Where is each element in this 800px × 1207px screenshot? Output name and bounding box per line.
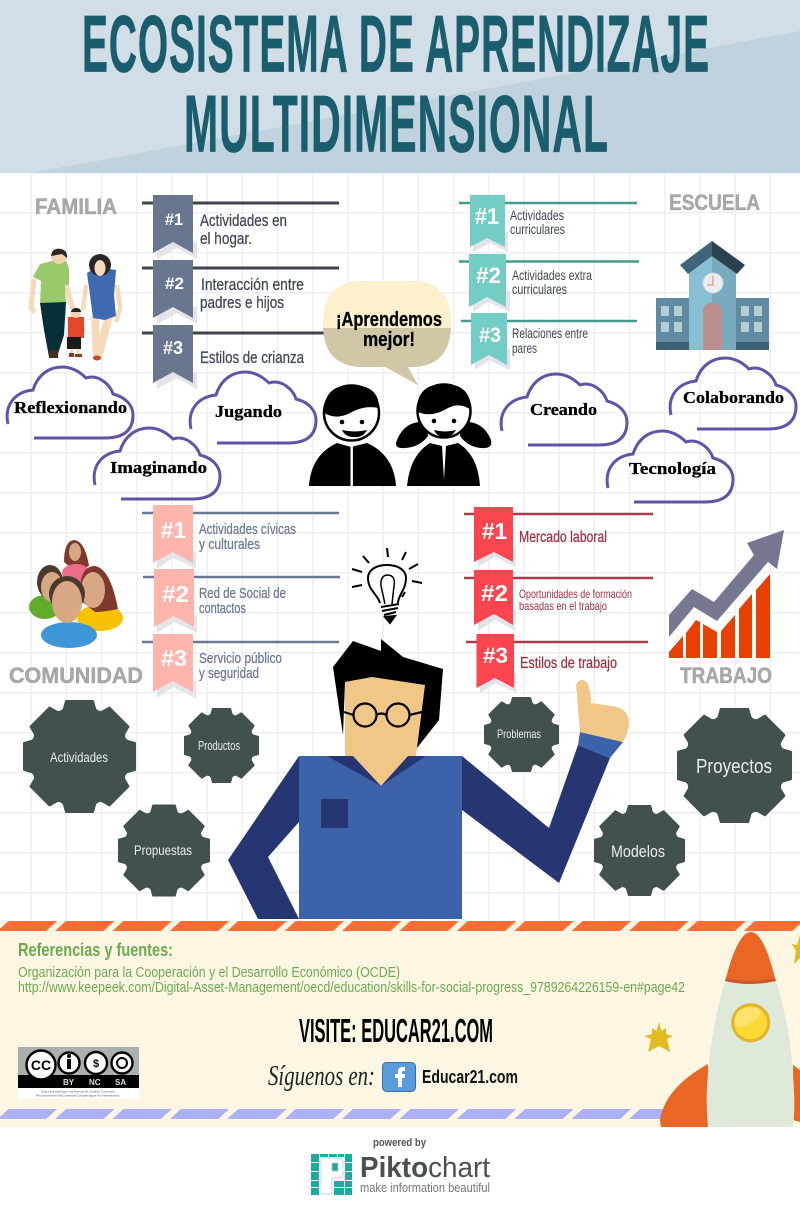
icon: girl xyxy=(396,384,491,486)
ribbon list: escuela: pares xyxy=(512,341,537,356)
ribbon list: familia xyxy=(142,195,339,389)
cloud: reflexionando xyxy=(7,367,133,438)
gear: problemas xyxy=(485,698,558,771)
gear: actividades: Actividades xyxy=(50,749,108,765)
heading: escuela: ESCUELA xyxy=(669,190,760,215)
gear: problemas: Problemas xyxy=(497,727,541,741)
ribbon list: escuela: curriculares xyxy=(510,222,565,237)
ribbon list: comunidad: contactos xyxy=(199,600,246,617)
cloud: colaborando: Colaborando xyxy=(683,388,784,407)
powered by: powered by xyxy=(373,1137,427,1149)
follow us: Educar21.com xyxy=(422,1067,518,1087)
cloud: colaborando xyxy=(670,358,796,429)
ribbon list: trabajo: basadas en el trabajo xyxy=(519,599,607,613)
creative commons badge: $ xyxy=(93,1058,99,1070)
ribbon list: escuela: Relaciones entre xyxy=(512,326,588,341)
cloud: imaginando xyxy=(94,428,220,499)
cloud: imaginando: Imaginando xyxy=(110,458,207,477)
heading: trabajo: TRABAJO xyxy=(680,663,772,688)
ribbon list: trabajo: Oportunidades de formación xyxy=(519,587,632,601)
icon: rocket xyxy=(660,932,800,1127)
gear: propuestas: Propuestas xyxy=(134,842,192,858)
ribbon list: comunidad: #3 xyxy=(161,645,187,671)
gear: proyectos xyxy=(678,709,791,822)
ribbon list: familia: padres e hijos xyxy=(200,293,284,312)
gear: productos: Productos xyxy=(198,738,240,753)
gear: modelos xyxy=(595,806,684,895)
ribbon list: escuela: #3 xyxy=(479,324,501,347)
ribbon list: escuela xyxy=(459,195,639,370)
footer panel xyxy=(0,921,800,1127)
creative commons badge: NC xyxy=(89,1078,101,1087)
cloud: tecnologia: Tecnología xyxy=(629,459,717,478)
gear: actividades xyxy=(24,701,135,812)
title xyxy=(82,0,710,170)
ribbon list: comunidad xyxy=(142,505,340,698)
ribbon list: familia: #2 xyxy=(165,274,184,293)
ribbon list: escuela: Actividades xyxy=(510,208,564,223)
piktochart logo xyxy=(311,1152,490,1195)
ribbon list: familia: el hogar. xyxy=(200,229,252,248)
gear: modelos: Modelos xyxy=(611,842,665,861)
ribbon list: escuela: curriculares xyxy=(512,282,567,297)
cloud: tecnologia xyxy=(607,431,733,502)
ribbon list: trabajo xyxy=(464,507,653,693)
ribbon list: escuela: Actividades extra xyxy=(512,268,592,283)
creative commons badge: Reconocimiento-NoComercial-CompartirIgual 4.0 Internacional. xyxy=(36,1094,120,1098)
creative commons badge xyxy=(18,1047,139,1099)
teacher figure xyxy=(228,639,629,919)
ribbon list: comunidad: y culturales xyxy=(199,536,260,553)
speech bubble xyxy=(323,281,451,385)
icon: family xyxy=(31,248,120,360)
ribbon list: trabajo: #2 xyxy=(481,580,508,606)
ribbon list: familia: Estilos de crianza xyxy=(200,348,304,367)
gear: propuestas xyxy=(119,805,209,896)
cloud: creando xyxy=(501,374,627,445)
text: VISITE: EDUCAR21.COM xyxy=(299,1012,493,1049)
ribbon list: familia: Actividades en xyxy=(200,211,287,230)
creative commons badge: Esta obra está bajo una licencia de Creative Commons xyxy=(41,1090,115,1094)
ribbon list: familia: #1 xyxy=(165,210,183,229)
heading: comunidad: COMUNIDAD xyxy=(9,663,143,688)
ribbon list: comunidad: y seguridad xyxy=(199,665,259,682)
ribbon list: trabajo: Mercado laboral xyxy=(519,529,607,546)
ribbon list: trabajo: #3 xyxy=(483,643,508,668)
icon: light bulb xyxy=(352,548,422,623)
ribbon list: trabajo: Estilos de trabajo xyxy=(520,655,617,672)
grid background xyxy=(0,173,800,921)
creative commons badge: SA xyxy=(115,1078,126,1087)
follow us xyxy=(268,1061,518,1092)
cloud: jugando xyxy=(190,372,316,443)
chart icon: growth arrow and bars xyxy=(669,530,784,658)
piktochart logo: make information beautiful xyxy=(360,1181,490,1195)
references: Organización para la Cooperación y el Desarrollo Económico (OCDE) xyxy=(18,964,400,981)
icon: facebook xyxy=(382,1062,416,1092)
ribbon list: escuela: #1 xyxy=(475,203,499,229)
references: Referencias y fuentes: xyxy=(18,940,173,960)
follow us: Síguenos en: xyxy=(268,1061,375,1092)
ribbon list: comunidad: #2 xyxy=(162,581,189,607)
ribbon list: familia: #3 xyxy=(163,338,183,358)
ribbon list: trabajo: #1 xyxy=(482,518,507,544)
gear: productos xyxy=(185,709,258,782)
cloud: creando: Creando xyxy=(530,400,597,419)
creative commons badge: BY xyxy=(63,1078,75,1087)
speech bubble: ¡Aprendemos xyxy=(336,308,442,331)
cloud: jugando: Jugando xyxy=(215,402,282,421)
gear: proyectos: Proyectos xyxy=(696,756,772,778)
icon: community group xyxy=(29,540,123,648)
ribbon list: familia: Interacción entre xyxy=(201,275,304,294)
speech bubble: mejor! xyxy=(363,328,415,351)
icon: stars xyxy=(644,935,800,1052)
references xyxy=(18,940,685,996)
ribbon list: comunidad: Servicio público xyxy=(199,650,282,667)
creative commons badge: CC xyxy=(31,1057,51,1073)
heading: familia: FAMILIA xyxy=(35,194,117,219)
ribbon list: comunidad: Red de Social de xyxy=(199,585,286,602)
ribbon list: comunidad: Actividades cívicas xyxy=(199,521,296,538)
icon: boy xyxy=(309,385,396,486)
ribbon list: escuela: #2 xyxy=(476,263,501,288)
logo mark xyxy=(311,1154,352,1195)
icon: school building xyxy=(656,241,769,350)
ribbon list: comunidad: #1 xyxy=(161,517,186,543)
header xyxy=(0,0,800,173)
cloud: reflexionando: Reflexionando xyxy=(14,398,127,417)
piktochart logo: Piktochart xyxy=(360,1152,490,1184)
